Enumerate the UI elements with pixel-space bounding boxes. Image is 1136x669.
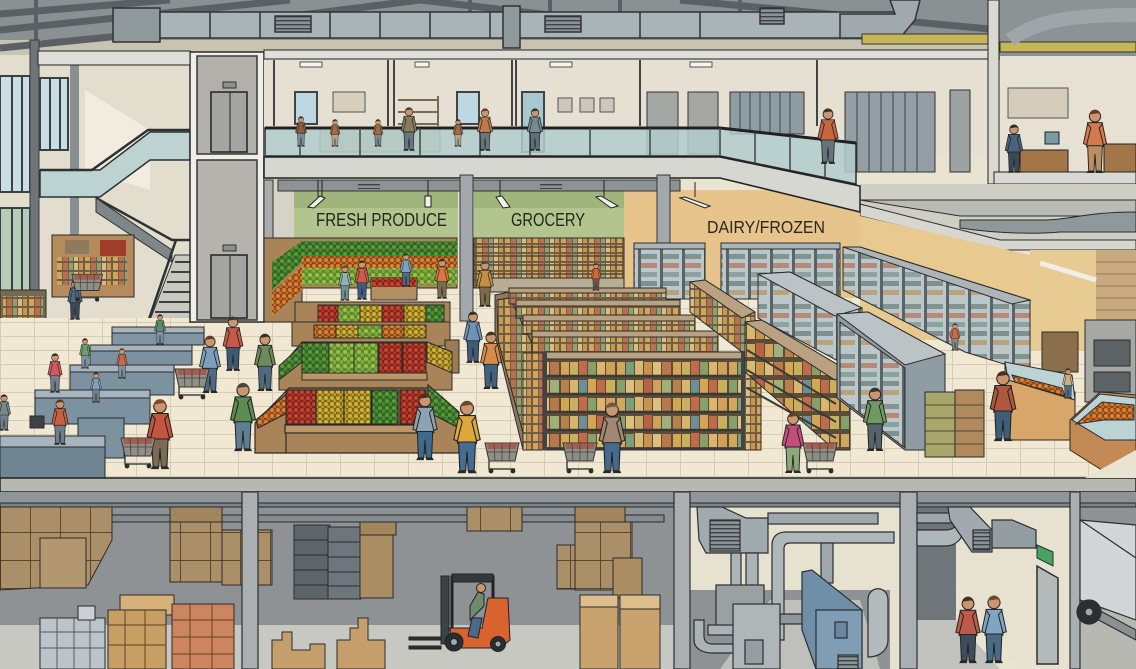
produce stand row 3 — [279, 342, 452, 390]
grocery gondola rows — [495, 288, 718, 450]
pallet stacks front — [40, 595, 660, 669]
upper mezzanine rooms — [38, 50, 994, 172]
pallet stacks rear — [0, 507, 642, 599]
freight elevator shaft — [190, 52, 264, 322]
dairy wall freezers — [634, 243, 840, 299]
staircase with glass balustrade — [40, 130, 190, 322]
forklift — [409, 574, 510, 652]
produce stand front — [255, 385, 459, 453]
basement columns — [242, 492, 1080, 669]
right office — [862, 0, 1136, 184]
mezzanine glass railing and slab — [264, 128, 860, 212]
floor — [0, 290, 1136, 478]
right wall freezers — [843, 247, 1030, 372]
kiosk left — [0, 235, 134, 340]
ceiling and roof trusses — [0, 0, 1136, 60]
grocery back shelving — [474, 238, 624, 292]
floor slab edge — [0, 450, 1136, 492]
sign: dairy/frozen: DAIRY/FROZEN — [707, 217, 825, 237]
side aisle shelves — [690, 280, 850, 450]
freezer islands — [758, 272, 945, 450]
produce stand row 1 — [295, 302, 450, 328]
exit sign and door — [1037, 545, 1058, 664]
mechanical room: units and pipes — [694, 570, 888, 669]
shoppers and staff — [0, 107, 1107, 473]
hanging lights — [308, 180, 710, 208]
main ventilation duct — [113, 0, 920, 48]
delivery truck — [1077, 520, 1136, 640]
produce stand row 2 — [292, 322, 459, 373]
checkout lanes — [0, 327, 204, 478]
stacked crates — [925, 390, 984, 457]
back wall, left atrium — [0, 55, 195, 325]
back kitchen and bakery counter — [1005, 320, 1136, 472]
mechanical room: air handler and ducts — [697, 507, 894, 640]
staff talking — [956, 595, 1006, 663]
right upper structure and curved duct — [860, 184, 1136, 250]
windows left — [0, 40, 68, 320]
overhead beam — [0, 503, 1136, 522]
shopping carts — [72, 274, 837, 473]
back wall produce display — [264, 238, 457, 322]
store columns — [460, 175, 670, 321]
front gondola shelf — [523, 352, 761, 450]
sign: grocery: GROCERY — [511, 210, 585, 230]
store back walls — [264, 175, 1136, 350]
basement warehouse background — [0, 492, 1136, 669]
sign: fresh produce: FRESH PRODUCE — [316, 210, 447, 230]
loading room duct — [917, 507, 1036, 552]
